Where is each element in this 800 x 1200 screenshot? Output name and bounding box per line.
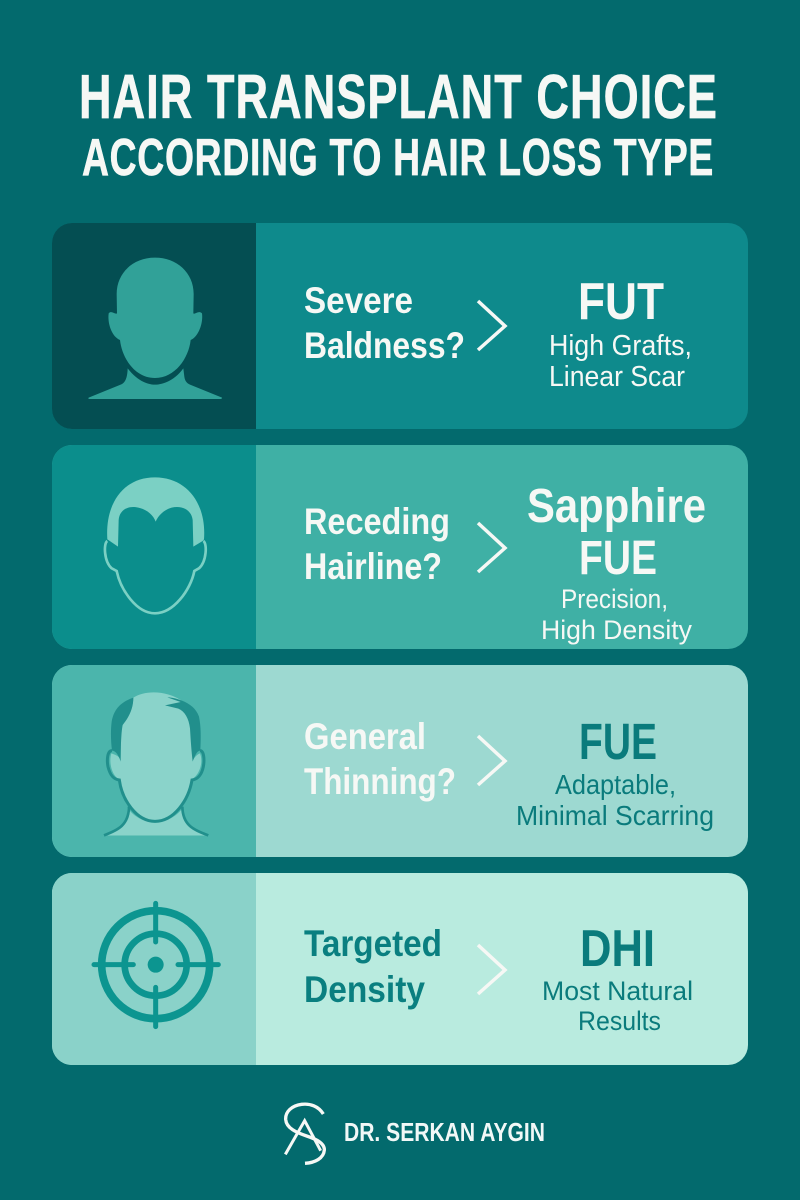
answer: Sapphire FUE: FUE (579, 532, 657, 585)
question: severe baldness: Severe (304, 280, 413, 321)
icon: SA monogram (285, 1104, 324, 1163)
question: targeted density: Targeted (304, 923, 442, 964)
question: severe baldness (304, 280, 465, 366)
question: general thinning (304, 716, 456, 802)
question: receding hairline (304, 501, 450, 587)
answer: DHI (542, 920, 693, 1036)
answer: FUE: Adaptable, (555, 769, 676, 800)
panel: receding hairline (52, 445, 748, 649)
question: targeted density (304, 923, 442, 1010)
answer: FUT: Linear Scar (549, 361, 685, 393)
question: receding hairline: Hairline? (304, 546, 442, 587)
arrow (478, 736, 505, 785)
answer: DHI: Results (578, 1006, 661, 1036)
icon: bald head (88, 258, 222, 399)
icon: target (94, 903, 218, 1027)
question: targeted density: Density (304, 969, 425, 1010)
answer: Sapphire FUE: Sapphire (527, 480, 706, 533)
question: general thinning: Thinning? (304, 761, 456, 802)
panel: severe baldness (52, 223, 748, 429)
answer: FUT: FUT (578, 273, 664, 331)
answer: FUE (516, 713, 714, 831)
answer: DHI: DHI (580, 920, 655, 978)
answer: Sapphire FUE: High Density (541, 615, 692, 645)
answer: Sapphire FUE: Precision, (561, 584, 668, 614)
arrow (478, 523, 505, 572)
icon: receding hairline head (105, 477, 206, 613)
question: receding hairline: Receding (304, 501, 450, 542)
footer logo and name (285, 1104, 545, 1163)
answer: FUE: FUE (579, 713, 657, 770)
icon: thinning head (104, 692, 208, 835)
arrow (478, 301, 505, 350)
title (79, 63, 718, 187)
answer: FUT (549, 273, 692, 393)
question: general thinning: General (304, 716, 426, 757)
panel: targeted density (52, 873, 748, 1065)
answer: DHI: Most Natural (542, 976, 693, 1006)
answer: Sapphire FUE (527, 480, 706, 645)
answer: FUT: High Grafts, (549, 330, 692, 362)
brand name: DR. SERKAN AYGIN (344, 1117, 545, 1147)
answer: FUE: Minimal Scarring (516, 800, 714, 831)
question: severe baldness: Baldness? (304, 325, 465, 366)
panel: general thinning (52, 665, 748, 857)
arrow (478, 945, 505, 994)
